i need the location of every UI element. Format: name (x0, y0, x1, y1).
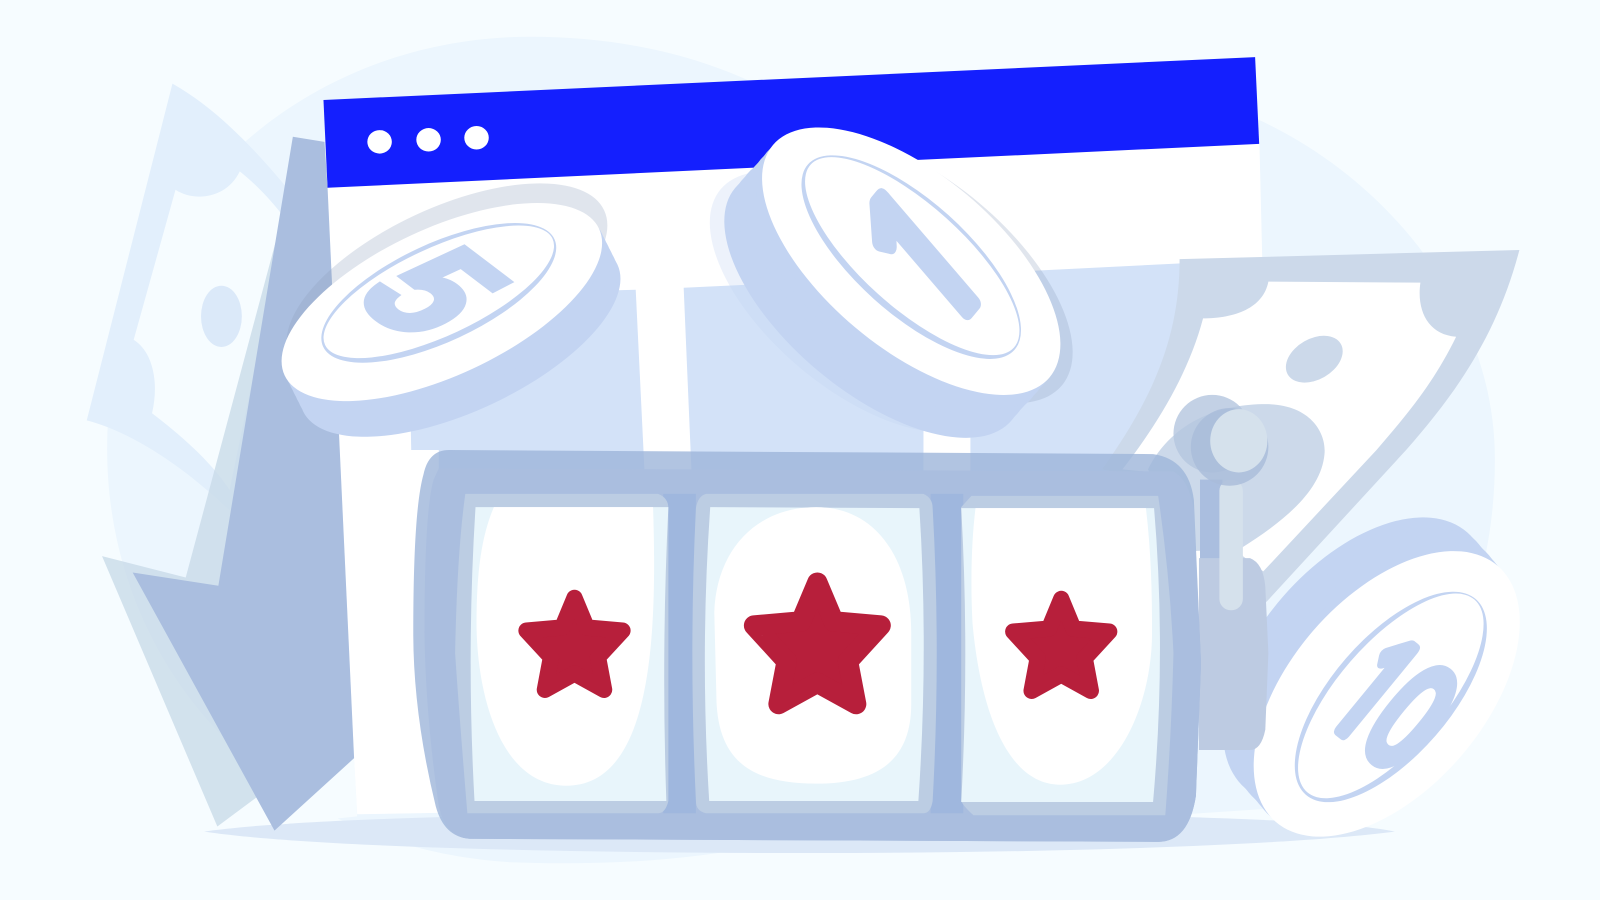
left banknote spot (201, 286, 242, 347)
coin five ring inner (306, 199, 571, 385)
reel three (961, 496, 1173, 815)
down arrow (133, 137, 354, 831)
coin ten ring inner (1267, 565, 1515, 827)
lever ball front (1191, 408, 1268, 486)
reel two glass (705, 507, 924, 801)
content panel right (918, 263, 1184, 480)
reel two (692, 494, 937, 813)
lever mount shadow (1148, 404, 1325, 551)
coin one (666, 79, 1118, 487)
reel dividers (663, 494, 963, 813)
lever stick (1219, 480, 1243, 610)
reel one symbol panel (477, 507, 654, 786)
coin one ring (771, 123, 1052, 392)
coin five edge (257, 167, 648, 478)
content panel left (408, 290, 645, 480)
arrow shadow (102, 235, 293, 827)
right banknote (1102, 250, 1519, 602)
right banknote spot (1278, 326, 1351, 392)
reel one star (527, 598, 622, 690)
window dots (367, 126, 489, 154)
reel two symbol panel (714, 507, 911, 784)
coin one face (717, 79, 1105, 444)
coin ten face (1202, 502, 1571, 885)
pale patch under arrow (281, 758, 357, 824)
coin ten numeral: 10 (1304, 619, 1472, 792)
coin five (254, 142, 648, 478)
reel three glass (961, 508, 1160, 802)
coin ten edge (1172, 469, 1566, 880)
coin one soft shadow (666, 124, 1045, 481)
machine inner frame (424, 468, 1201, 842)
background blob (107, 37, 1495, 863)
browser window (323, 57, 1266, 814)
reel one (455, 494, 668, 813)
window body (328, 133, 1266, 814)
reel two star (754, 583, 881, 704)
coin one numeral: 1 (835, 154, 1017, 369)
coin five face (254, 162, 630, 442)
coin one ring inner (776, 127, 1048, 386)
lever ball back (1173, 395, 1251, 472)
reel three band (961, 496, 1173, 815)
coin five back shadow (258, 142, 636, 425)
coin ten ring (1261, 560, 1521, 834)
lever box (1199, 558, 1268, 750)
lever post (1200, 480, 1222, 561)
window title bar (323, 57, 1259, 188)
coin five ring (302, 195, 575, 391)
reel three symbol panel (971, 508, 1152, 785)
slot machine lever (1173, 395, 1268, 750)
left banknote inner (134, 171, 286, 490)
machine outer frame (413, 450, 1201, 842)
right banknote inner (1122, 282, 1456, 571)
reel two band (692, 494, 937, 813)
left banknote (87, 84, 296, 520)
reel three star (1013, 599, 1109, 691)
slot machine (413, 450, 1201, 842)
reel one glass (471, 507, 668, 801)
coin one edge (679, 86, 1099, 487)
floor shadow (204, 812, 1395, 853)
coin one back shadow (729, 87, 1118, 452)
coin ten (1172, 469, 1571, 885)
lever ball highlight (1210, 409, 1267, 472)
coin five numeral: 5 (317, 224, 549, 360)
reel one band (455, 494, 668, 813)
content panel middle (684, 277, 923, 480)
